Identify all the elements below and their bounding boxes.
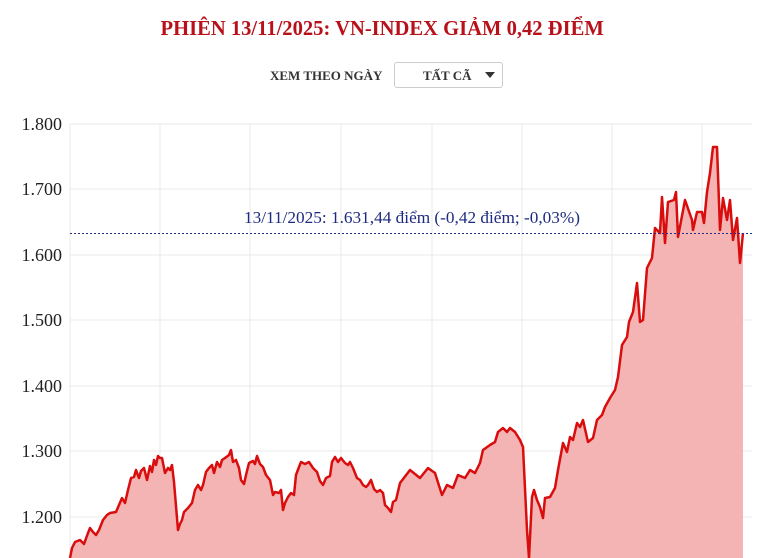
y axis labels: 1.400 <box>22 376 62 396</box>
title: PHIÊN 13/11/2025: VN-INDEX GIẢM 0,42 ĐIỂM <box>161 16 604 40</box>
reference line <box>70 232 752 234</box>
control: date selector: XEM THEO NGÀY <box>270 68 382 83</box>
dropdown: TẤT CÃ <box>423 68 472 83</box>
y axis labels: 1.500 <box>22 310 62 330</box>
y axis labels: 1.600 <box>22 245 62 265</box>
y axis labels: 1.200 <box>22 507 62 527</box>
y axis labels: 1.700 <box>22 179 62 199</box>
annotation: 13/11/2025: 1.631,44 điểm (-0,42 điểm; -0,03%) <box>244 208 580 227</box>
y axis labels: 1.300 <box>22 441 62 461</box>
dropdown <box>394 62 503 88</box>
area series <box>70 147 743 558</box>
y axis labels: 1.800 <box>22 114 62 134</box>
y axis labels <box>22 114 62 527</box>
control: date selector <box>270 62 503 88</box>
